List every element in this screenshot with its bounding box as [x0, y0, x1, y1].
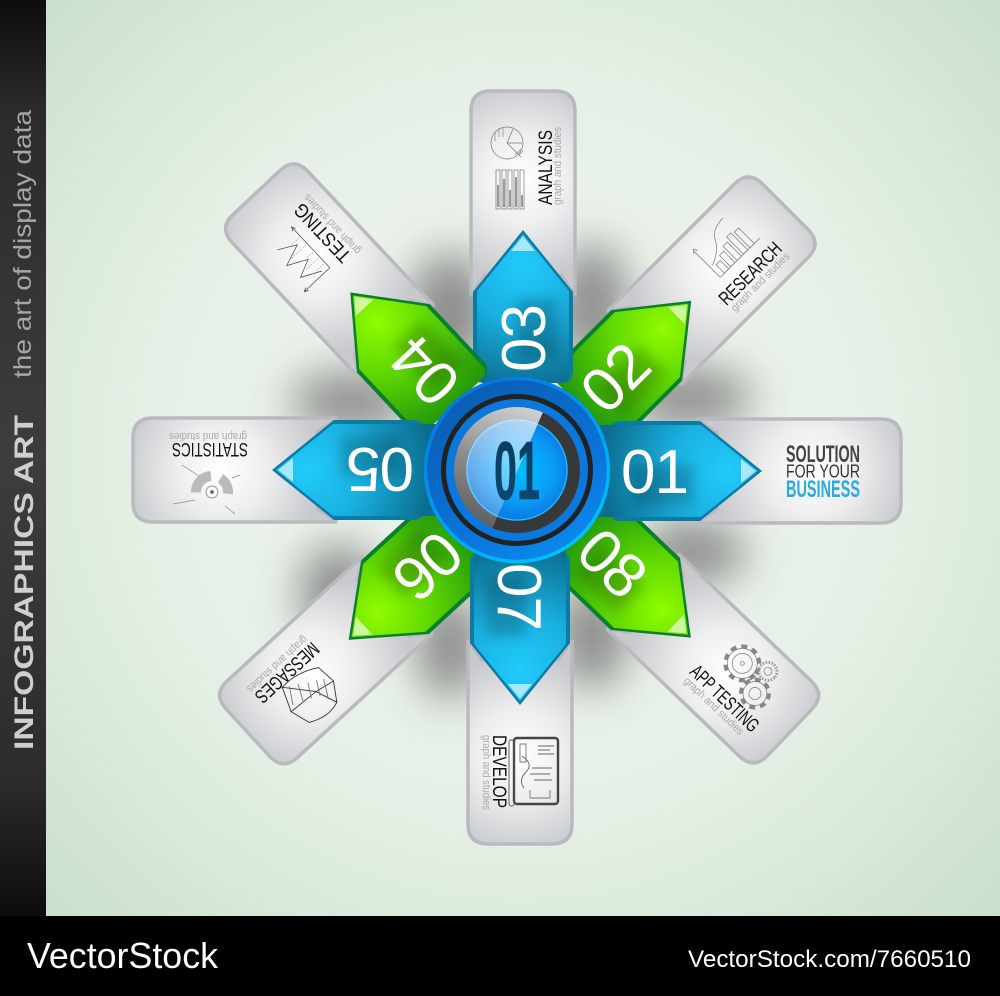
panel 07: [468, 640, 572, 844]
for your: FOR YOUR: [786, 462, 860, 482]
hub: 01: [494, 424, 540, 517]
label statistics: STATISTICS: [172, 438, 248, 460]
number 06: 06: [379, 517, 476, 614]
hub glass glare: [454, 407, 543, 528]
footer logo: VectorStock: [27, 935, 219, 976]
drop shadows behind arrows: [290, 243, 752, 699]
arm 02: research: [546, 170, 822, 446]
arrow 07: [470, 540, 570, 705]
arrow 06: [315, 499, 495, 677]
hub inner ring: [460, 413, 574, 527]
arm 06: messages: [213, 498, 496, 771]
number shadow 08: [574, 544, 645, 614]
number 04: 04: [377, 322, 474, 419]
footer url: VectorStock.com/7660510: [688, 946, 971, 973]
panel 03: [471, 91, 575, 295]
icon: pie and bars: [491, 127, 524, 209]
label analysis: ANALYSIS: [535, 130, 557, 205]
headline: [786, 441, 860, 503]
number shadow 03: [517, 299, 557, 359]
panel 08: [606, 554, 826, 770]
hub core: [467, 420, 567, 520]
hub outer disc: [426, 378, 608, 562]
number shadow 06: [376, 527, 448, 598]
sublabel testing: graph and studies: [301, 191, 364, 256]
footer band: [0, 916, 1000, 996]
sidebar: [0, 0, 46, 916]
label testing: TESTING: [290, 198, 356, 267]
label research: RESEARCH: [715, 238, 787, 310]
number 02: 02: [567, 330, 664, 427]
sublabel statistics: graph and studies: [169, 430, 247, 442]
arrow 05: [272, 420, 437, 520]
number shadow 02: [596, 345, 666, 416]
number 01: 01: [621, 438, 689, 507]
arm 07: develop: [468, 540, 572, 844]
panel 01: [697, 419, 901, 523]
sidebar tagline: the art of display data: [9, 110, 37, 378]
arrow 08: [546, 496, 725, 674]
hub black ring: [444, 396, 590, 544]
solution: SOLUTION: [786, 441, 860, 468]
number 03: 03: [490, 304, 559, 372]
sidebar title: INFOGRAPHICS ART: [9, 414, 39, 750]
number shadow 04: [393, 319, 463, 391]
icon: growth chart: [691, 210, 760, 279]
label app testing: APP TESTING: [685, 661, 763, 737]
panel 05: [133, 418, 337, 522]
panel 06: [213, 556, 433, 771]
arrow 04: [314, 258, 491, 438]
sublabel research: graph and studies: [729, 250, 793, 314]
arm 04: testing: [219, 157, 493, 440]
arm 05: statistics: [133, 418, 437, 522]
icon: faceted pie: [275, 659, 347, 731]
hub: [420, 378, 608, 562]
arrow 03: [473, 230, 573, 383]
arm 08: app testing: [544, 494, 826, 770]
number 07: 07: [484, 563, 553, 631]
sublabel analysis: graph and studies: [552, 127, 564, 205]
number 08: 08: [563, 515, 660, 612]
label develop: DEVELOP: [488, 735, 510, 808]
icon: gears: [711, 636, 789, 713]
label messages: MESSAGES: [250, 637, 323, 707]
number shadow 05: [341, 436, 401, 476]
number shadow 01: [633, 465, 693, 505]
arm 03: analysis: [471, 91, 575, 383]
arrow 01: [597, 421, 762, 521]
arrow 02: [548, 265, 727, 444]
panel 04: [219, 157, 434, 377]
panel 02: [607, 170, 822, 385]
number shadow 07: [486, 576, 526, 636]
icon: line chart: [266, 226, 333, 293]
icon: sketched board: [509, 738, 558, 806]
business: BUSINESS: [786, 476, 860, 503]
icon: radial chart: [173, 465, 240, 514]
arm 01: solution: [597, 419, 901, 523]
sublabel develop: graph and studies: [480, 735, 492, 810]
sublabel app testing: graph and studies: [681, 675, 746, 738]
number 05: 05: [346, 434, 414, 503]
sublabel messages: graph and studies: [244, 633, 310, 695]
